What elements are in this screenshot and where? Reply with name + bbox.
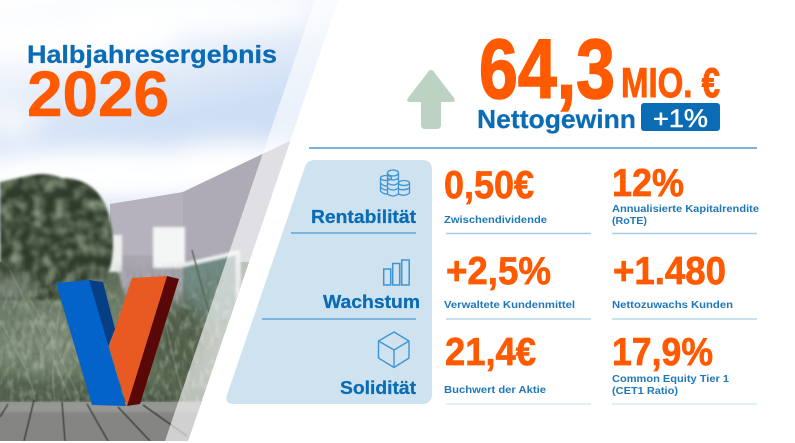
icon: coins bbox=[380, 170, 410, 196]
title: Halbjahresergebnis bbox=[27, 41, 277, 69]
translucent diagonal band bbox=[165, 0, 338, 441]
label: Rentabilität: Rentabilität bbox=[311, 207, 416, 227]
photo background bbox=[0, 0, 340, 443]
headline figure bbox=[479, 22, 720, 116]
label: Solidität: Solidität bbox=[340, 378, 416, 398]
KPI: CET1: 17,9% bbox=[612, 331, 713, 374]
KPI: Zwischendividende bbox=[444, 164, 547, 226]
KPI: Kapitalrendite: Annualisierte Kapitalrendite bbox=[612, 204, 759, 215]
KPI: CET1: Common Equity Tier 1 bbox=[612, 374, 729, 385]
title bbox=[27, 41, 277, 130]
icon: cube bbox=[378, 332, 409, 368]
KPI: Nettozuwachs: +1.480 bbox=[613, 250, 726, 293]
KPI: CET1: (CET1 Ratio) bbox=[612, 386, 678, 397]
icon: bars bbox=[384, 260, 409, 285]
KPI: Kapitalrendite bbox=[612, 162, 759, 227]
title: 2026 bbox=[27, 58, 169, 130]
net profit label: Nettogewinn bbox=[477, 104, 636, 134]
KPI: Nettozuwachs bbox=[612, 250, 733, 311]
headline figure: MIO. € bbox=[621, 59, 720, 106]
label: Wachstum: Wachstum bbox=[323, 292, 420, 312]
headline figure: 64,3 bbox=[479, 22, 615, 116]
KPI: Kapitalrendite: (RoTE) bbox=[612, 216, 647, 227]
panel: categories bbox=[226, 160, 432, 404]
up arrow icon bbox=[407, 70, 455, 129]
change badge: +1% bbox=[653, 105, 708, 133]
change badge bbox=[641, 103, 720, 133]
KPI: Buchwert bbox=[444, 331, 546, 396]
KPI: Kundenmittel bbox=[444, 250, 575, 311]
KPI: Kundenmittel: +2,5% bbox=[446, 250, 551, 293]
KPI: Kundenmittel: Verwaltete Kundenmittel bbox=[444, 300, 575, 311]
KPI: Buchwert: Buchwert der Aktie bbox=[444, 385, 546, 396]
KPI: Buchwert: 21,4€ bbox=[445, 331, 536, 374]
KPI: Zwischendividende: Zwischendividende bbox=[444, 215, 547, 226]
KPI: Zwischendividende: 0,50€ bbox=[444, 164, 534, 207]
KPI: CET1 bbox=[612, 331, 729, 397]
V logo bbox=[56, 276, 179, 406]
KPI: Nettozuwachs: Nettozuwachs Kunden bbox=[612, 300, 733, 311]
KPI: Kapitalrendite: 12% bbox=[612, 162, 684, 205]
